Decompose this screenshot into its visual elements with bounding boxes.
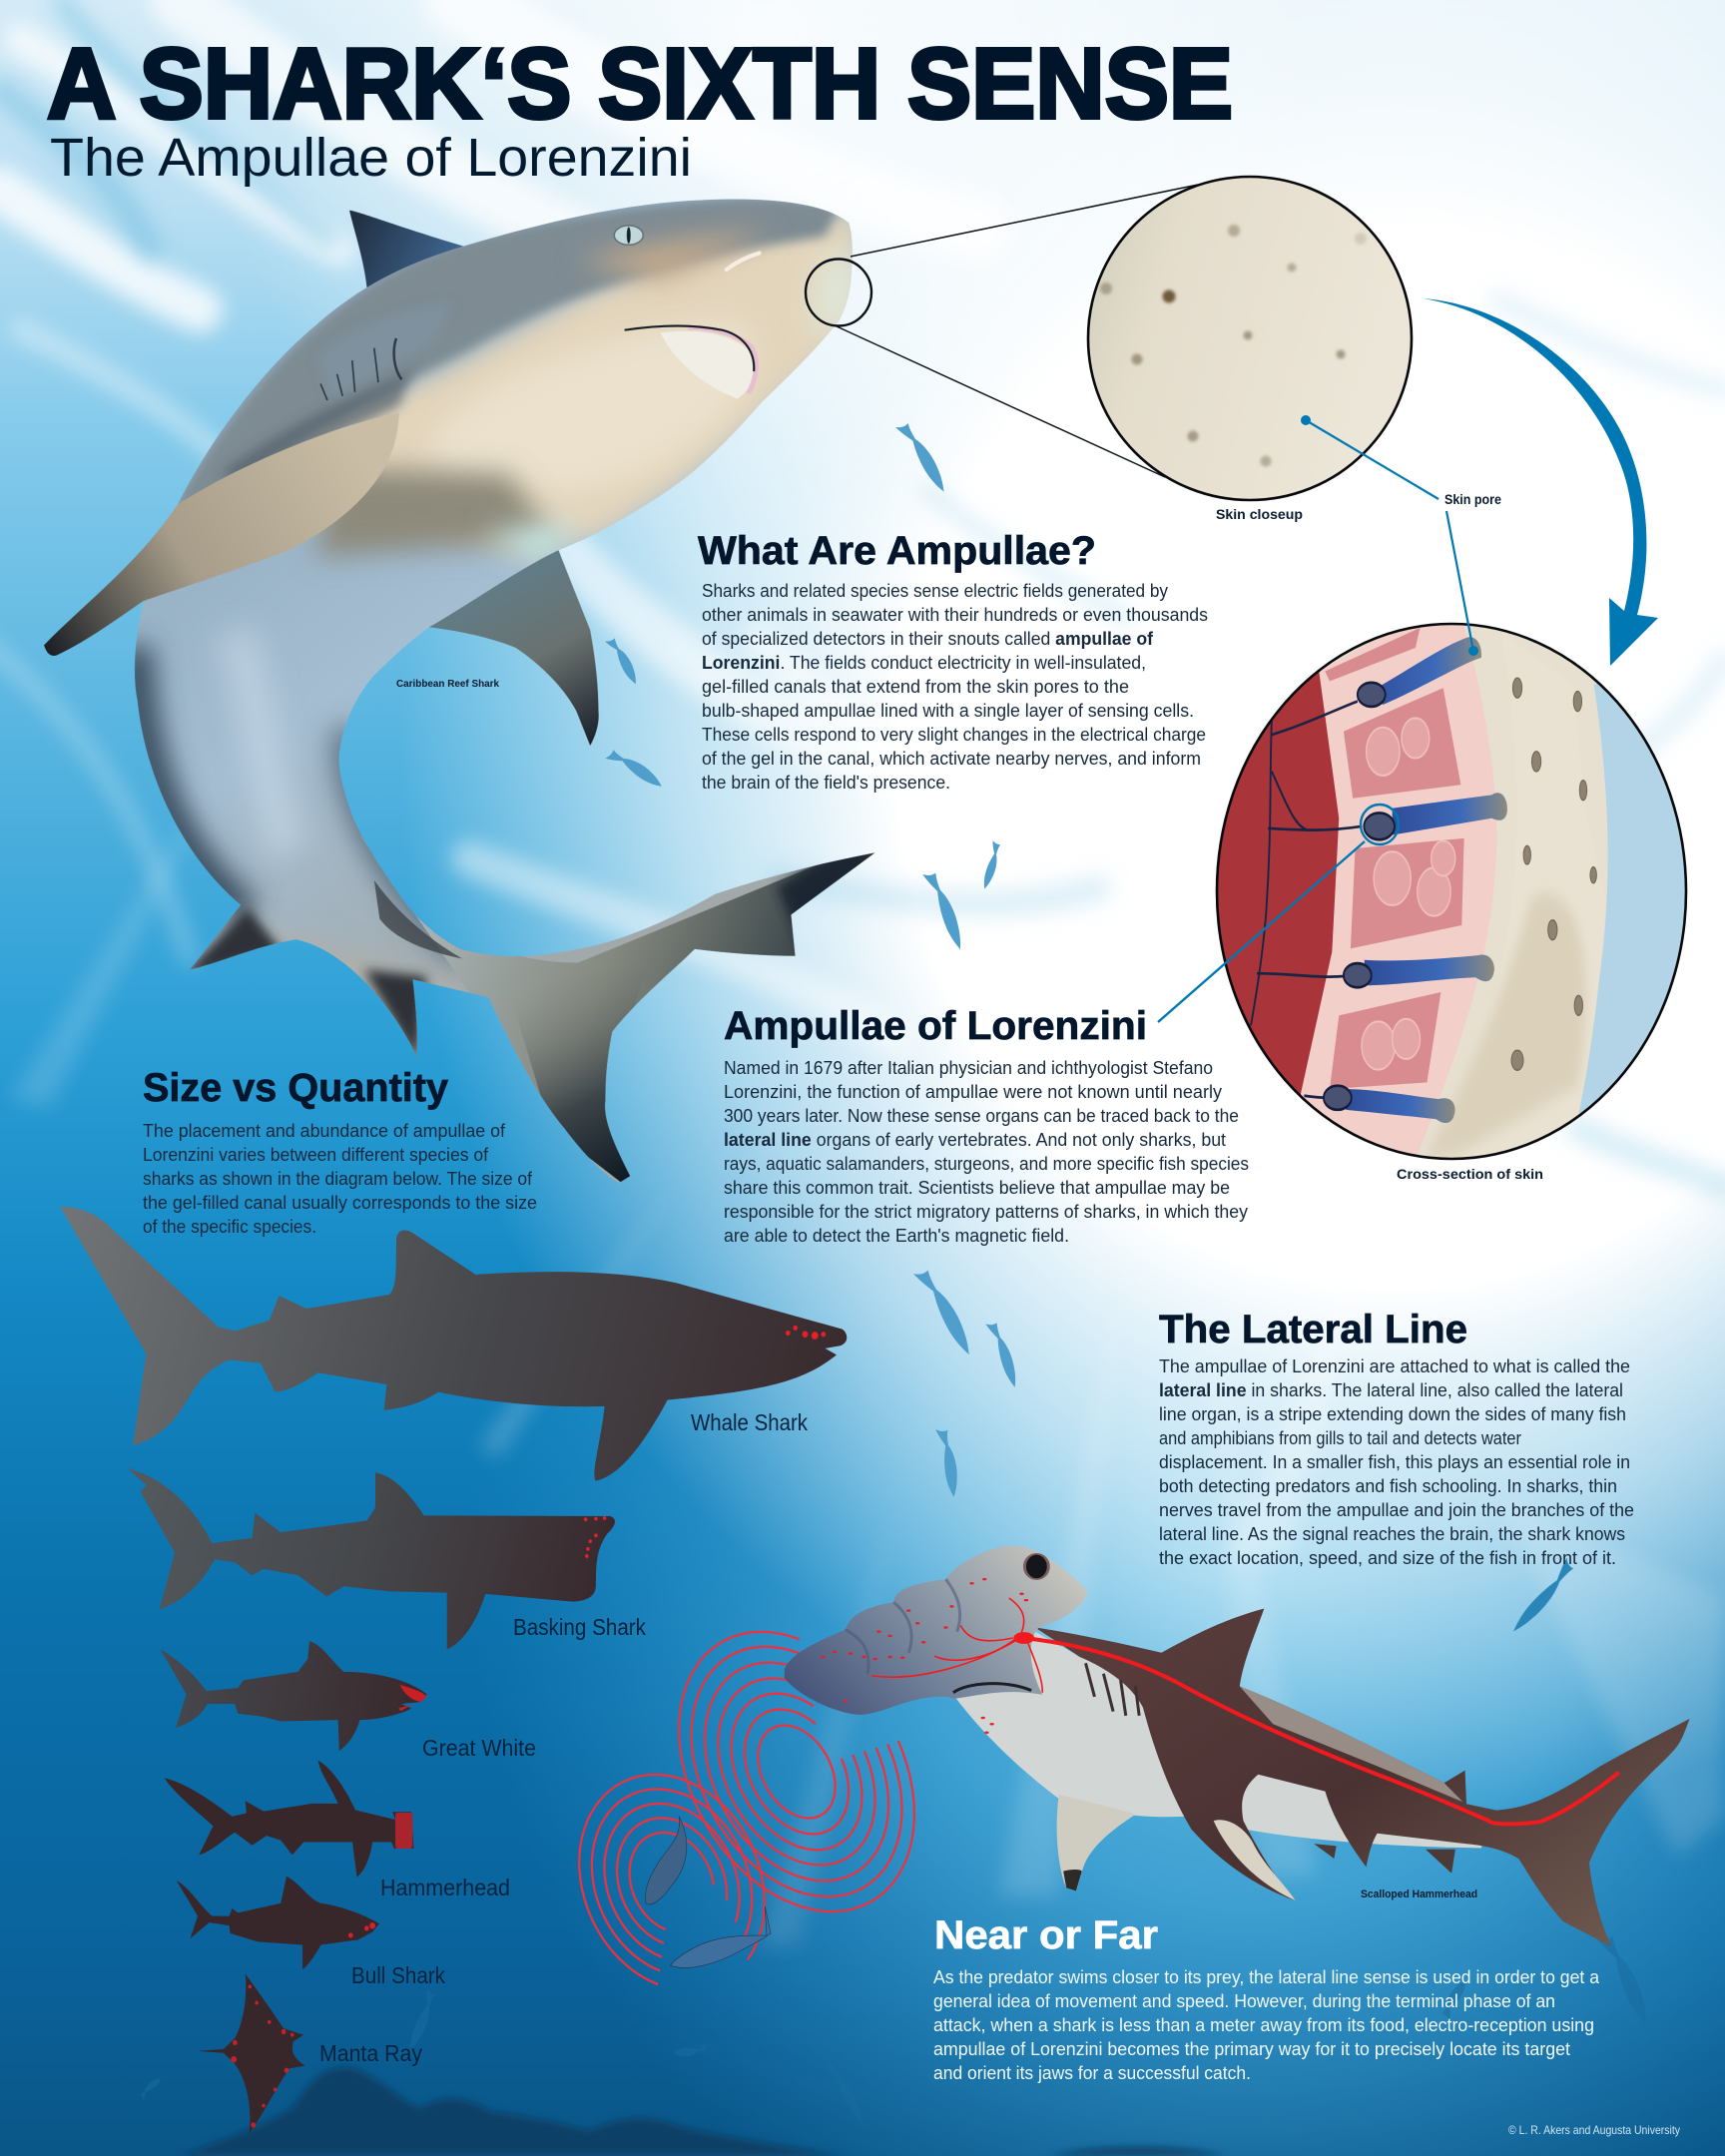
dorsal fin bbox=[349, 211, 463, 291]
silhouette: hammerhead bbox=[165, 1761, 413, 1878]
section: the lateral line: the exact location, speed, and size of the fish in front of it. bbox=[1159, 1548, 1616, 1568]
silhouette labels: Great White bbox=[422, 1735, 536, 1761]
section: ampullae of lorenzini: responsible for the strict migratory patterns of sharks, in which they bbox=[724, 1202, 1248, 1222]
section: what are ampullae: other animals in seawater with their hundreds or even thousands bbox=[702, 605, 1208, 625]
gill slits bbox=[320, 338, 401, 400]
skin closeup circle bbox=[1088, 177, 1412, 500]
silhouette labels: Bull Shark bbox=[351, 1962, 445, 1988]
silhouette: bull shark bbox=[177, 1877, 379, 1969]
section: what are ampullae: These cells respond to very slight changes in the electrical charge bbox=[702, 725, 1206, 745]
section: the lateral line: both detecting predators and fish schooling. In sharks, thin bbox=[1159, 1476, 1617, 1496]
section: near or far: As the predator swims closer to its prey, the lateral line sense is used in order to get a bbox=[933, 1967, 1600, 1987]
background distant fish bbox=[138, 1931, 1655, 2125]
ampullae bulbs bbox=[1324, 683, 1395, 1110]
section: the lateral line: lateral line. As the signal reaches the brain, the shark knows bbox=[1159, 1524, 1625, 1544]
cross-section outline bbox=[1217, 624, 1686, 1159]
section: ampullae of lorenzini: share this common trait. Scientists believe that ampullae may be bbox=[724, 1178, 1230, 1198]
illustration: scalloped hammerhead bbox=[785, 1546, 1690, 1946]
silhouette labels: Basking Shark bbox=[513, 1614, 646, 1640]
eye bbox=[1024, 1554, 1048, 1579]
snout locator circle bbox=[806, 260, 871, 325]
zoom lines from snout to closeup bbox=[837, 185, 1198, 477]
shark body bbox=[44, 199, 874, 1183]
section: the lateral line: nerves travel from the ampullae and join the branches of the bbox=[1159, 1500, 1634, 1520]
subtitle: The Ampullae of Lorenzini bbox=[50, 128, 692, 188]
rear underside fins bbox=[1314, 1844, 1455, 1874]
skin pore callout bbox=[1301, 415, 1501, 656]
reef at the bottom bbox=[180, 2067, 1228, 2156]
shark upper body bbox=[1035, 1609, 1690, 1946]
canals bbox=[1346, 637, 1507, 1123]
small swimming fish in mid water bbox=[605, 419, 1577, 1637]
section: the lateral line: displacement. In a smaller fish, this plays an essential role in bbox=[1159, 1452, 1630, 1472]
section: what are ampullae: gel-filled canals that extend from the skin pores to the bbox=[702, 677, 1129, 697]
section: what are ampullae: of the gel in the canal, which activate nearby nerves, and inform bbox=[702, 749, 1201, 769]
silhouette labels bbox=[319, 1409, 808, 2066]
copyright: © L. R. Akers and Augusta University bbox=[1508, 2123, 1680, 2137]
zoomed cross-section tissue layers bbox=[1216, 618, 1703, 1166]
caption: scalloped hammerhead: Scalloped Hammerhead bbox=[1361, 1888, 1477, 1900]
cross-section of skin bbox=[1218, 625, 1685, 1158]
title: A SHARK‘S SIXTH SENSE bbox=[47, 28, 1233, 140]
right pectoral fin bbox=[429, 550, 599, 746]
silhouette labels: Whale Shark bbox=[691, 1409, 808, 1435]
section: near or far: and orient its jaws for a successful catch. bbox=[933, 2063, 1251, 2083]
first pectoral fin bbox=[1057, 1795, 1135, 1890]
electric field ripples bbox=[545, 1590, 962, 2021]
section: size vs quantity: Size vs Quantity bbox=[143, 1066, 449, 1110]
section: what are ampullae: of specialized detectors in their snouts called ampullae of bbox=[702, 629, 1154, 649]
nostril highlight bbox=[727, 254, 760, 270]
section: size vs quantity: The placement and abundance of ampullae of bbox=[143, 1121, 506, 1141]
caption: cross-section: Cross-section of skin bbox=[1397, 1166, 1543, 1182]
silhouette: great white bbox=[161, 1641, 427, 1751]
section: near or far bbox=[933, 1913, 1600, 2083]
section: the lateral line: and amphibians from gills to tail and detects water bbox=[1159, 1428, 1521, 1448]
section: size vs quantity: of the specific species. bbox=[143, 1217, 316, 1237]
head lobe shading bbox=[846, 1579, 960, 1674]
section: ampullae of lorenzini: rays, aquatic salamanders, sturgeons, and more specific fish species bbox=[724, 1154, 1249, 1174]
section: what are ampullae: What Are Ampullae? bbox=[698, 529, 1096, 573]
pores bbox=[1511, 678, 1596, 1070]
section: the lateral line: lateral line in sharks. The lateral line, also called the lateral bbox=[1159, 1380, 1623, 1400]
curved blue arrow bbox=[1423, 298, 1658, 666]
illustration: Caribbean reef shark bbox=[44, 199, 874, 1183]
section: size vs quantity: sharks as shown in the diagram below. The size of bbox=[143, 1169, 533, 1189]
section: what are ampullae: bulb-shaped ampullae lined with a single layer of sensing cells. bbox=[702, 701, 1194, 721]
eye bbox=[614, 226, 643, 245]
section: the lateral line: line organ, is a stripe extending down the sides of many fish bbox=[1159, 1404, 1626, 1424]
lateral line nerves bbox=[871, 1598, 1619, 1824]
ampullae pores on head bbox=[821, 1578, 1028, 1734]
section: the lateral line: The ampullae of Lorenzini are attached to what is called the bbox=[1159, 1356, 1630, 1376]
white underside bbox=[953, 1632, 1488, 1848]
silhouette labels: Hammerhead bbox=[380, 1875, 510, 1900]
mouth bbox=[953, 1684, 1031, 1693]
rear inner fin bbox=[374, 880, 462, 958]
section: near or far: Near or Far bbox=[934, 1913, 1158, 1957]
silhouette: basking shark bbox=[127, 1468, 615, 1649]
hammer head bbox=[785, 1546, 1087, 1715]
caption: skin closeup: Skin closeup bbox=[1216, 506, 1303, 522]
silhouette: whale shark bbox=[60, 1207, 847, 1481]
prey fish bbox=[645, 1817, 771, 1967]
caption: reef shark: Caribbean Reef Shark bbox=[396, 678, 499, 690]
section: near or far: ampullae of Lorenzini becomes the primary way for it to precisely locate its target bbox=[933, 2039, 1570, 2059]
section: what are ampullae: Lorenzini. The fields conduct electricity in well-insulated, bbox=[702, 653, 1146, 673]
section: ampullae of lorenzini: Named in 1679 after Italian physician and ichthyologist Stefano bbox=[724, 1058, 1213, 1078]
section: size vs quantity: Lorenzini varies between different species of bbox=[143, 1145, 489, 1165]
section: the lateral line bbox=[1159, 1308, 1634, 1568]
section: ampullae of lorenzini: 300 years later. Now these sense organs can be traced back to the bbox=[724, 1106, 1239, 1126]
section: size vs quantity: the gel-filled canal usually corresponds to the size bbox=[143, 1193, 537, 1213]
gill slits bbox=[1086, 1663, 1139, 1716]
section: what are ampullae bbox=[698, 529, 1208, 793]
section: ampullae of lorenzini: are able to detect the Earth's magnetic field. bbox=[724, 1226, 1069, 1246]
section: what are ampullae: the brain of the field's presence. bbox=[702, 773, 950, 793]
section: ampullae of lorenzini bbox=[724, 1004, 1249, 1246]
section: what are ampullae: Sharks and related species sense electric fields generated by bbox=[702, 581, 1168, 601]
section: size vs quantity bbox=[143, 1066, 537, 1237]
ampulla callout line bbox=[1158, 805, 1399, 1022]
silhouette: manta ray bbox=[198, 1974, 305, 2133]
mouth bbox=[625, 326, 756, 393]
lower jaw bbox=[660, 331, 756, 399]
section: the lateral line: The Lateral Line bbox=[1159, 1308, 1467, 1351]
left pectoral fin bbox=[44, 412, 399, 656]
silhouette labels: Manta Ray bbox=[319, 2040, 422, 2066]
species silhouettes comparison bbox=[60, 1207, 847, 2133]
section: near or far: attack, when a shark is less than a meter away from its food, electro-reception using bbox=[933, 2015, 1594, 2035]
section: ampullae of lorenzini: lateral line organs of early vertebrates. And not only sharks, but bbox=[724, 1130, 1226, 1150]
pectoral fin highlight bbox=[1214, 1820, 1296, 1900]
light flank on upper back bbox=[1240, 1686, 1462, 1802]
skin pore callout: Skin pore bbox=[1444, 491, 1501, 507]
section: near or far: general idea of movement and speed. However, during the terminal phase of an bbox=[933, 1991, 1555, 2011]
section: ampullae of lorenzini: Lorenzini, the function of ampullae were not known until nearly bbox=[724, 1082, 1222, 1102]
nerves bbox=[1251, 702, 1362, 1098]
section: ampullae of lorenzini: Ampullae of Lorenzini bbox=[724, 1004, 1147, 1048]
